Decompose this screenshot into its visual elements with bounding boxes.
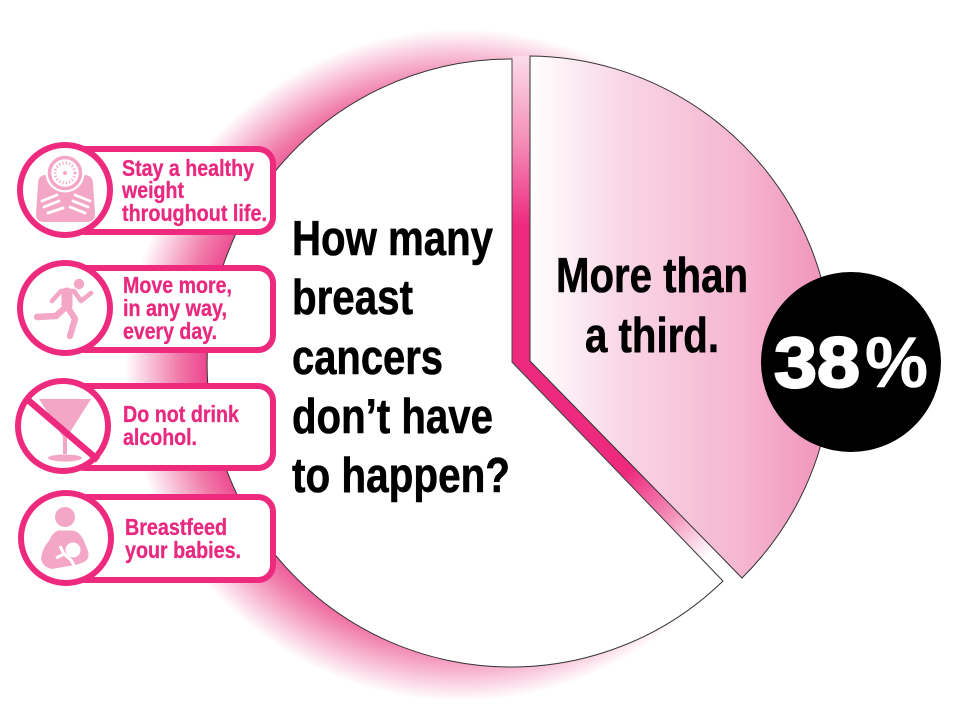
heading: how many breast cancers: don’t have xyxy=(292,390,493,444)
panel: no alcohol xyxy=(18,381,273,471)
text: healthy weight xyxy=(121,155,267,226)
text: no alcohol xyxy=(123,401,239,450)
text: move more: every day. xyxy=(123,318,217,344)
pink glow behind pie xyxy=(125,29,797,701)
heading: how many breast cancers: breast xyxy=(292,271,413,325)
label: more than a third: a third. xyxy=(585,309,719,363)
heading: how many breast cancers xyxy=(292,212,510,503)
text: move more: Move more, xyxy=(123,272,232,298)
icon: runner xyxy=(37,279,91,336)
panel: breastfeed xyxy=(21,493,273,583)
badge: 38 percent: % xyxy=(865,324,928,403)
label: more than a third xyxy=(556,249,748,363)
icon: cocktail glass crossed out xyxy=(28,399,98,462)
pink shadow strip along wedge edge xyxy=(512,56,742,581)
text: healthy weight: weight xyxy=(121,177,184,203)
panel: healthy weight xyxy=(20,145,273,235)
heading: how many breast cancers: How many xyxy=(292,212,493,266)
text: healthy weight: throughout life. xyxy=(122,200,267,226)
text: breastfeed xyxy=(125,514,241,563)
label: more than a third: More than xyxy=(556,249,748,303)
badge: 38 percent xyxy=(761,272,941,452)
text: breastfeed: your babies. xyxy=(125,537,241,563)
text: no alcohol: Do not drink xyxy=(123,401,239,427)
text: move more: in any way, xyxy=(123,295,227,321)
icon: scale xyxy=(36,154,95,222)
text: breastfeed: Breastfeed xyxy=(125,514,227,540)
icon: mother and baby xyxy=(41,507,88,569)
text: no alcohol: alcohol. xyxy=(123,424,197,450)
panel: move more xyxy=(20,263,273,353)
text: move more xyxy=(123,272,232,344)
text: healthy weight: Stay a healthy xyxy=(122,155,254,181)
white pie slice xyxy=(207,59,723,667)
pie wedge: more than a third xyxy=(530,56,833,578)
heading: how many breast cancers: cancers xyxy=(292,331,443,385)
badge: 38 percent: 38 xyxy=(774,324,860,403)
heading: how many breast cancers: to happen? xyxy=(292,449,510,503)
